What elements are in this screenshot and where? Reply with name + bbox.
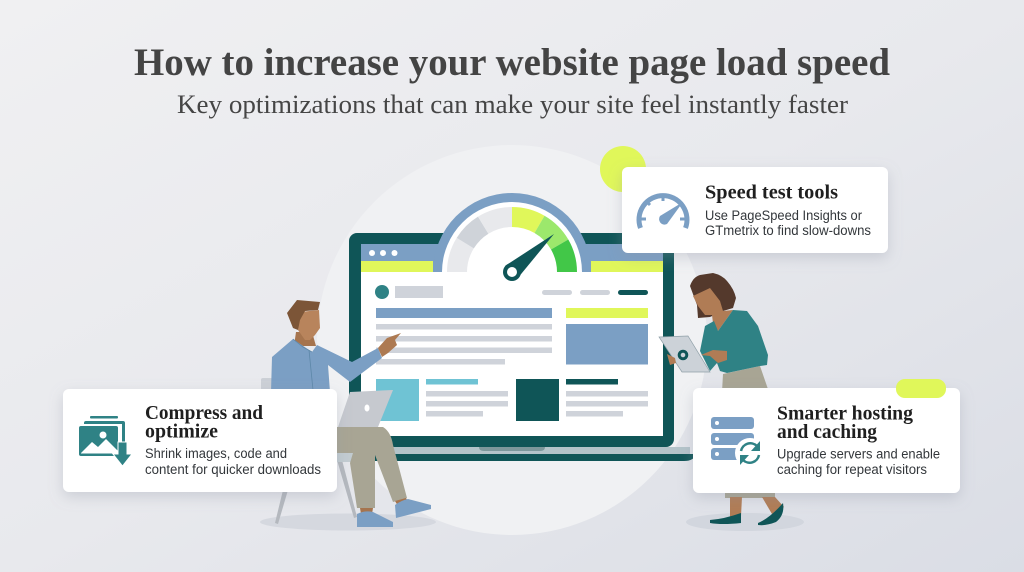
laptop frame — [349, 233, 674, 447]
hands — [667, 350, 727, 365]
bottom content right — [516, 379, 648, 421]
card: smarter hosting and caching — [693, 379, 960, 493]
shirt and arm — [271, 339, 382, 392]
browser top bar — [361, 244, 663, 272]
lime tab — [896, 379, 946, 398]
card heading — [145, 402, 263, 442]
lime accent circle — [600, 146, 646, 192]
title: How to increase your website page load speed — [134, 41, 890, 84]
ankles — [360, 498, 408, 514]
browser screen — [361, 244, 663, 436]
laptop base — [375, 447, 696, 461]
card heading: Compress and — [145, 402, 263, 424]
card text: Use PageSpeed Insights or — [705, 208, 862, 223]
hair — [690, 273, 736, 318]
card heading: Speed test tools — [705, 182, 838, 204]
icon: image stack with download arrow — [79, 416, 132, 466]
card text: caching for repeat visitors — [777, 462, 927, 477]
laptop illustration — [349, 193, 696, 461]
chair — [261, 378, 357, 524]
icon: servers with refresh — [711, 417, 765, 468]
page header — [375, 285, 648, 299]
pointing hand — [378, 333, 401, 357]
face and neck — [693, 288, 733, 331]
man with laptop — [260, 300, 436, 530]
trousers — [337, 427, 407, 508]
tablet — [659, 336, 710, 372]
card text: GTmetrix to find slow-downs — [705, 223, 871, 238]
bottom content left — [376, 379, 508, 421]
card text — [705, 208, 871, 238]
background circle — [317, 145, 707, 535]
card text: content for quicker downloads — [145, 462, 321, 477]
card heading: optimize — [145, 420, 218, 442]
card text — [145, 446, 321, 477]
card heading: Smarter hosting — [777, 402, 913, 424]
card text: Shrink images, code and — [145, 446, 287, 461]
ground shadow — [260, 514, 436, 530]
card: speed test tools — [622, 167, 888, 253]
teal top — [700, 310, 768, 373]
speedometer gauge — [433, 193, 591, 281]
card: compress and optimize — [63, 389, 337, 492]
legs — [725, 490, 784, 518]
card text: Upgrade servers and enable — [777, 446, 940, 462]
icon: speedometer — [639, 194, 687, 228]
laptop on lap — [338, 390, 393, 427]
head — [287, 300, 320, 346]
shoes — [357, 499, 431, 527]
card text — [777, 446, 940, 477]
skirt — [722, 366, 769, 392]
card heading: and caching — [777, 421, 877, 443]
subtitle: Key optimizations that can make your site feel instantly faster — [177, 90, 848, 119]
ground shadow — [686, 513, 804, 531]
shoes — [710, 503, 783, 525]
sidebar block — [566, 308, 648, 364]
card heading — [777, 402, 913, 443]
main article block — [376, 308, 552, 364]
woman with tablet — [659, 273, 804, 531]
